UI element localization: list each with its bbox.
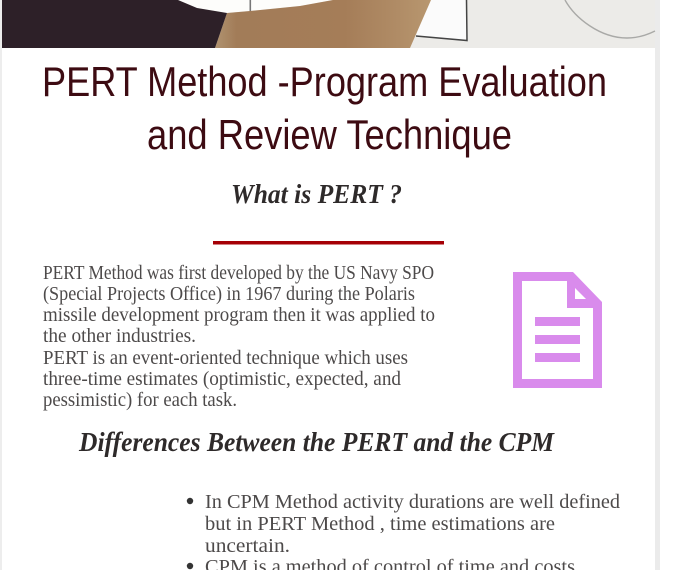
header photo xyxy=(2,0,655,48)
text block: PERT description: (Special Projects Office) in 1967 during the Polaris xyxy=(43,284,415,305)
text block: PERT description: PERT Method was first developed by the US Navy SPO xyxy=(43,263,434,284)
title xyxy=(42,58,607,158)
bullet list: but in PERT Method , time estimations are xyxy=(205,513,555,535)
text block: PERT description: pessimistic) for each task. xyxy=(43,390,237,411)
heading: differences: Differences Between the PERT and the CPM xyxy=(78,427,555,457)
text block: PERT description: missile development program then it was applied to xyxy=(43,305,435,326)
title: PERT Method -Program Evaluation xyxy=(42,58,607,105)
text block: PERT description: three-time estimates (optimistic, expected, and xyxy=(43,369,401,390)
bullet list: uncertain. xyxy=(205,535,290,557)
bullet list xyxy=(187,491,620,570)
icon: document xyxy=(513,272,602,388)
text block: PERT description: the other industries. xyxy=(43,326,196,347)
red divider xyxy=(213,241,444,244)
bullet list: In CPM Method activity durations are well defined xyxy=(205,491,620,513)
text block: PERT description: PERT is an event-oriented technique which uses xyxy=(43,348,408,369)
title: and Review Technique xyxy=(147,111,512,158)
heading: What is PERT: What is PERT ? xyxy=(231,179,402,209)
text block: PERT description xyxy=(43,263,435,411)
